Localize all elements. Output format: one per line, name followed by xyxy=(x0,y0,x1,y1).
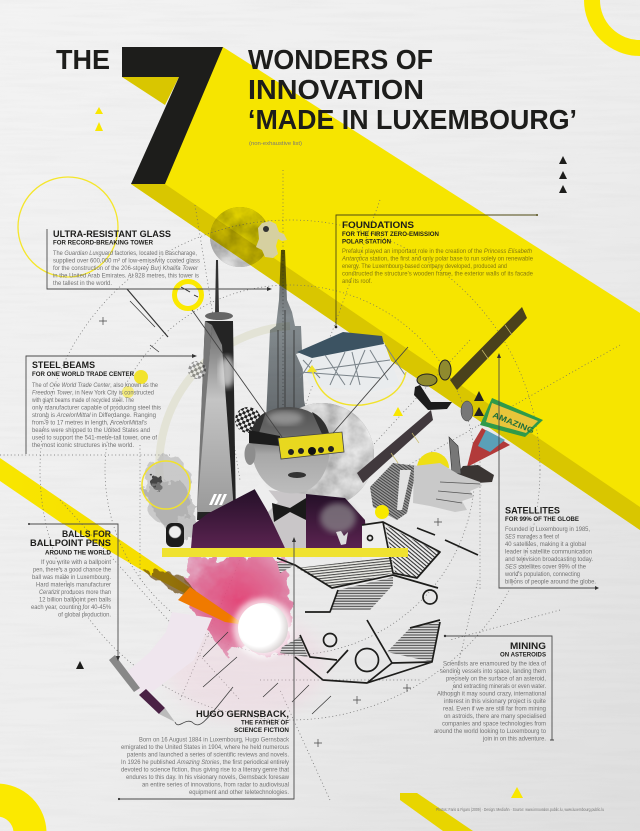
left yellow band with fiery tip xyxy=(0,458,245,625)
body text: each year, counting for 40-45% xyxy=(31,604,111,611)
body text xyxy=(53,250,200,287)
subheading: ON ASTEROIDS xyxy=(500,652,546,658)
shirt xyxy=(257,489,306,548)
illustration: Earth globe behind portrait xyxy=(270,403,374,507)
moon xyxy=(210,207,270,267)
body text xyxy=(341,248,534,285)
body text: The Guardian Luxguard factories, located in Bascharage, xyxy=(53,250,197,257)
body text: 40 satellites, making it a global xyxy=(505,541,586,548)
galaxy on shoulder xyxy=(320,503,356,533)
glowing white ball xyxy=(233,598,293,658)
held card xyxy=(449,437,461,474)
body text: 12 billion ballpoint pen balls xyxy=(39,596,111,604)
sleeve xyxy=(370,463,417,520)
subheading: FOR 99% OF THE GLOBE xyxy=(505,516,579,523)
astronaut xyxy=(256,221,287,258)
arm and hand holding pen xyxy=(109,612,212,722)
body text: join in on this adventure. xyxy=(482,736,546,742)
subheading: FOR ONE WORLD TRADE CENTER xyxy=(32,371,135,378)
magazine pages xyxy=(467,428,510,467)
body text: interest in this visionary project is quite xyxy=(444,698,547,705)
body text: supplied over 600,000 m² of low-emissivity coated glass xyxy=(53,258,200,264)
body text: Founded in Luxembourg in 1985, xyxy=(505,526,590,533)
body text: Freedom Tower, in New York City is constructed xyxy=(32,390,155,396)
body text: Scientists are enamoured by the idea of xyxy=(443,660,546,668)
subheading line two: POLAR STATION xyxy=(342,238,392,246)
solar panel upper xyxy=(450,307,527,390)
thin diagonal lines and crosses xyxy=(99,289,442,747)
ear xyxy=(244,443,256,465)
subheading: FOR RECORD-BREAKING TOWER xyxy=(53,240,154,246)
hand holding magazine xyxy=(370,398,543,520)
body text: If you write with a ballpoint xyxy=(41,559,111,566)
fiery band tip overlay xyxy=(178,587,245,625)
heading: FOUNDATIONS xyxy=(342,220,415,231)
magazine cover xyxy=(480,398,543,437)
black numeral 7 xyxy=(122,47,223,184)
title xyxy=(56,44,577,135)
title: THE xyxy=(56,44,110,75)
body text: equipment and other teletechnologies. xyxy=(189,789,289,796)
body text: on astroids, there are many specialised xyxy=(444,713,547,720)
collar xyxy=(254,482,278,512)
title: INNOVATION xyxy=(248,74,424,105)
heading: ULTRA-RESISTANT GLASS xyxy=(53,229,172,240)
engraved insect on band xyxy=(145,570,199,596)
body text xyxy=(31,382,161,449)
head xyxy=(250,407,330,493)
yellow triangles xyxy=(95,107,523,798)
body text: pen, there's a good chance the xyxy=(33,566,112,574)
body text: billions of people around the globe. xyxy=(505,578,596,586)
panel: balls for ballpoint pens xyxy=(28,523,120,661)
corner ring: bottom left xyxy=(0,800,30,831)
phone base xyxy=(455,465,494,484)
body text: an entire series of innovations, from radar to audiovisual xyxy=(142,782,289,788)
dishes xyxy=(439,360,451,380)
thin yellow circle behind glass text xyxy=(18,177,118,277)
body text xyxy=(31,559,112,618)
panel seams xyxy=(391,325,512,463)
body text: for the construction of the 206-storey Burj Khalifa Tower xyxy=(53,265,199,272)
body text: and its roof. xyxy=(342,278,372,285)
body text: Ceratizit produces more than xyxy=(39,589,111,596)
body text: used to support the 541-metre-tall tower, one of xyxy=(32,434,157,442)
body text: the tallest in the world. xyxy=(53,280,112,287)
body text: from 9 to 17 metres in length, ArcelorMittal's xyxy=(32,420,147,426)
panel: steel beams xyxy=(26,354,197,454)
body text: and extracting minerals or even water. xyxy=(453,683,546,690)
black triangles xyxy=(76,156,567,669)
thin yellow circle around ink xyxy=(142,461,190,509)
body text: ball was made in Luxembourg. xyxy=(32,574,111,581)
body text: The of One World Trade Center, also known as the xyxy=(32,382,159,389)
mouth xyxy=(288,472,306,478)
yellow goggles xyxy=(278,432,344,459)
footer credits: Photos: Faris & Figaro (2009) · Design: Mediahn · Source: www.innovation.public.lu, www.luxembourg.public.lu xyxy=(436,807,605,812)
subheading: THE FATHER OF xyxy=(241,720,289,726)
solar panel lower xyxy=(357,410,433,483)
checkered spheres xyxy=(188,361,261,433)
asteroid cap xyxy=(362,522,393,560)
large yellow diagonal band xyxy=(122,47,640,530)
body text: in the United Arab Emirates. At 828 metres, this tower is xyxy=(53,272,199,280)
body text: In 1926 he published Amazing Stories, the first periodical entirely xyxy=(121,759,290,766)
asteroid line drawing xyxy=(277,522,478,683)
heading: STEEL BEAMS xyxy=(32,360,96,371)
portrait: Hugo Gernsback xyxy=(191,407,367,548)
body text: real. Even if we are still far from mining xyxy=(443,706,547,712)
hand xyxy=(413,463,482,512)
subheading: AROUND THE WORLD xyxy=(45,550,112,556)
panel: satellites xyxy=(497,353,599,590)
body text: sending vessels into space, landing them xyxy=(440,668,546,675)
body text: of global production. xyxy=(58,612,111,618)
body text: Although it may sound crazy, international xyxy=(437,690,546,698)
body text: Prefalux played an important role in the creation of the Princess Elisabeth xyxy=(342,248,533,255)
body text: companies and space technologies from xyxy=(442,720,546,728)
heading: HUGO GERNSBACK, xyxy=(196,709,289,720)
body text: Born on 16 August 1884 in Luxembourg, Hugo Gernsback xyxy=(139,736,290,744)
panel: ultra-resistant glass xyxy=(47,229,272,291)
heading: SATELLITES xyxy=(505,506,561,516)
body text: the most iconic structures in the world. xyxy=(32,442,134,449)
magazine cover: AMAZING xyxy=(491,411,535,435)
lapel emblem xyxy=(336,531,348,545)
yellow horizontal bar xyxy=(162,548,408,557)
body text: world's population, connecting xyxy=(504,571,580,578)
body text: leader in satellite communication xyxy=(505,548,593,556)
body text: emigrated to the United States in 1904, where he held numerous xyxy=(121,744,289,751)
body text: SES manages a fleet of xyxy=(505,534,559,540)
heading line two: BALLPOINT PENS xyxy=(30,538,112,549)
body text: constructed the structure's wooden frame, the exterior walls of its facade xyxy=(342,270,534,278)
bow tie xyxy=(272,498,306,522)
corner ring: top right xyxy=(592,0,640,48)
panel: mining on asteroids xyxy=(434,635,554,742)
asteroid outline strokes xyxy=(277,522,478,683)
panel: foundations xyxy=(335,214,538,328)
pink paint splash xyxy=(165,558,325,720)
body text: strong is ArcelorMittal in Differdange. Ranging xyxy=(32,412,157,419)
illustration: One World Trade Center xyxy=(197,260,236,520)
body text xyxy=(434,660,547,742)
ink splash near clock xyxy=(142,454,195,540)
jacket xyxy=(191,489,285,548)
body text: and television broadcasting today. xyxy=(505,556,593,563)
goggle strap xyxy=(249,430,280,446)
dotted construction circles and radial lines xyxy=(0,170,620,800)
satellite body xyxy=(414,385,452,410)
body text: Antarctica station, the first and only polar base to run solely on renewable xyxy=(341,256,534,262)
body text: patents and launched a series of scientific reviews and novels. xyxy=(127,752,289,758)
heading: BALLS FOR xyxy=(62,529,111,540)
yellow dots xyxy=(122,370,389,519)
subheading line two: SCIENCE FICTION xyxy=(234,727,290,734)
body text: with giant beams made of recycled steel. The xyxy=(31,397,134,404)
hair shadow xyxy=(250,412,330,438)
subtitle note: (non-exhaustive list) xyxy=(249,141,302,147)
clock xyxy=(166,523,184,547)
title: ‘MADE IN LUXEMBOURG’ xyxy=(248,104,577,135)
title: WONDERS OF xyxy=(248,44,433,75)
body text: beams were shipped to the United States and xyxy=(32,427,151,434)
body text: SES satellites cover 99% of the xyxy=(505,564,587,570)
panel: Hugo Gernsback xyxy=(118,537,296,800)
illustration: Burj Khalifa tower xyxy=(266,250,308,420)
asteroid hatched facets xyxy=(297,557,393,588)
cuff xyxy=(397,470,411,510)
illustration: polar station xyxy=(296,332,405,392)
yellow arc with arrow around station xyxy=(307,365,406,405)
satellite xyxy=(357,307,527,483)
asteroid craters xyxy=(324,634,336,646)
antennae xyxy=(474,391,484,401)
jacket right side xyxy=(304,494,367,548)
yellow semicircle behind hand xyxy=(417,452,449,468)
heading: MINING xyxy=(510,641,546,652)
yellow ring with thin marks xyxy=(174,282,202,308)
body text: devoted to science fiction, thus giving rise to a literary genre that xyxy=(121,766,289,774)
body text: around the world looking to Luxembourg to xyxy=(434,728,547,735)
body text xyxy=(121,736,290,796)
squiggle from pen xyxy=(175,687,233,725)
body text: energy. The Luxembourg-based company developed, produced and xyxy=(342,263,507,270)
bottom yellow band xyxy=(400,793,473,831)
body text: endures to this day. In his visionary novels, Gernsback foresaw xyxy=(126,774,290,781)
subheading: FOR THE FIRST ZERO-EMISSION xyxy=(342,231,440,238)
body text: precisely on the surface of an asteroid, xyxy=(446,676,546,682)
body text: only manufacturer capable of producing steel this xyxy=(32,404,161,412)
body text xyxy=(504,526,596,586)
body text: Hard materials manufacturer xyxy=(36,582,111,588)
forehead light xyxy=(267,411,303,425)
